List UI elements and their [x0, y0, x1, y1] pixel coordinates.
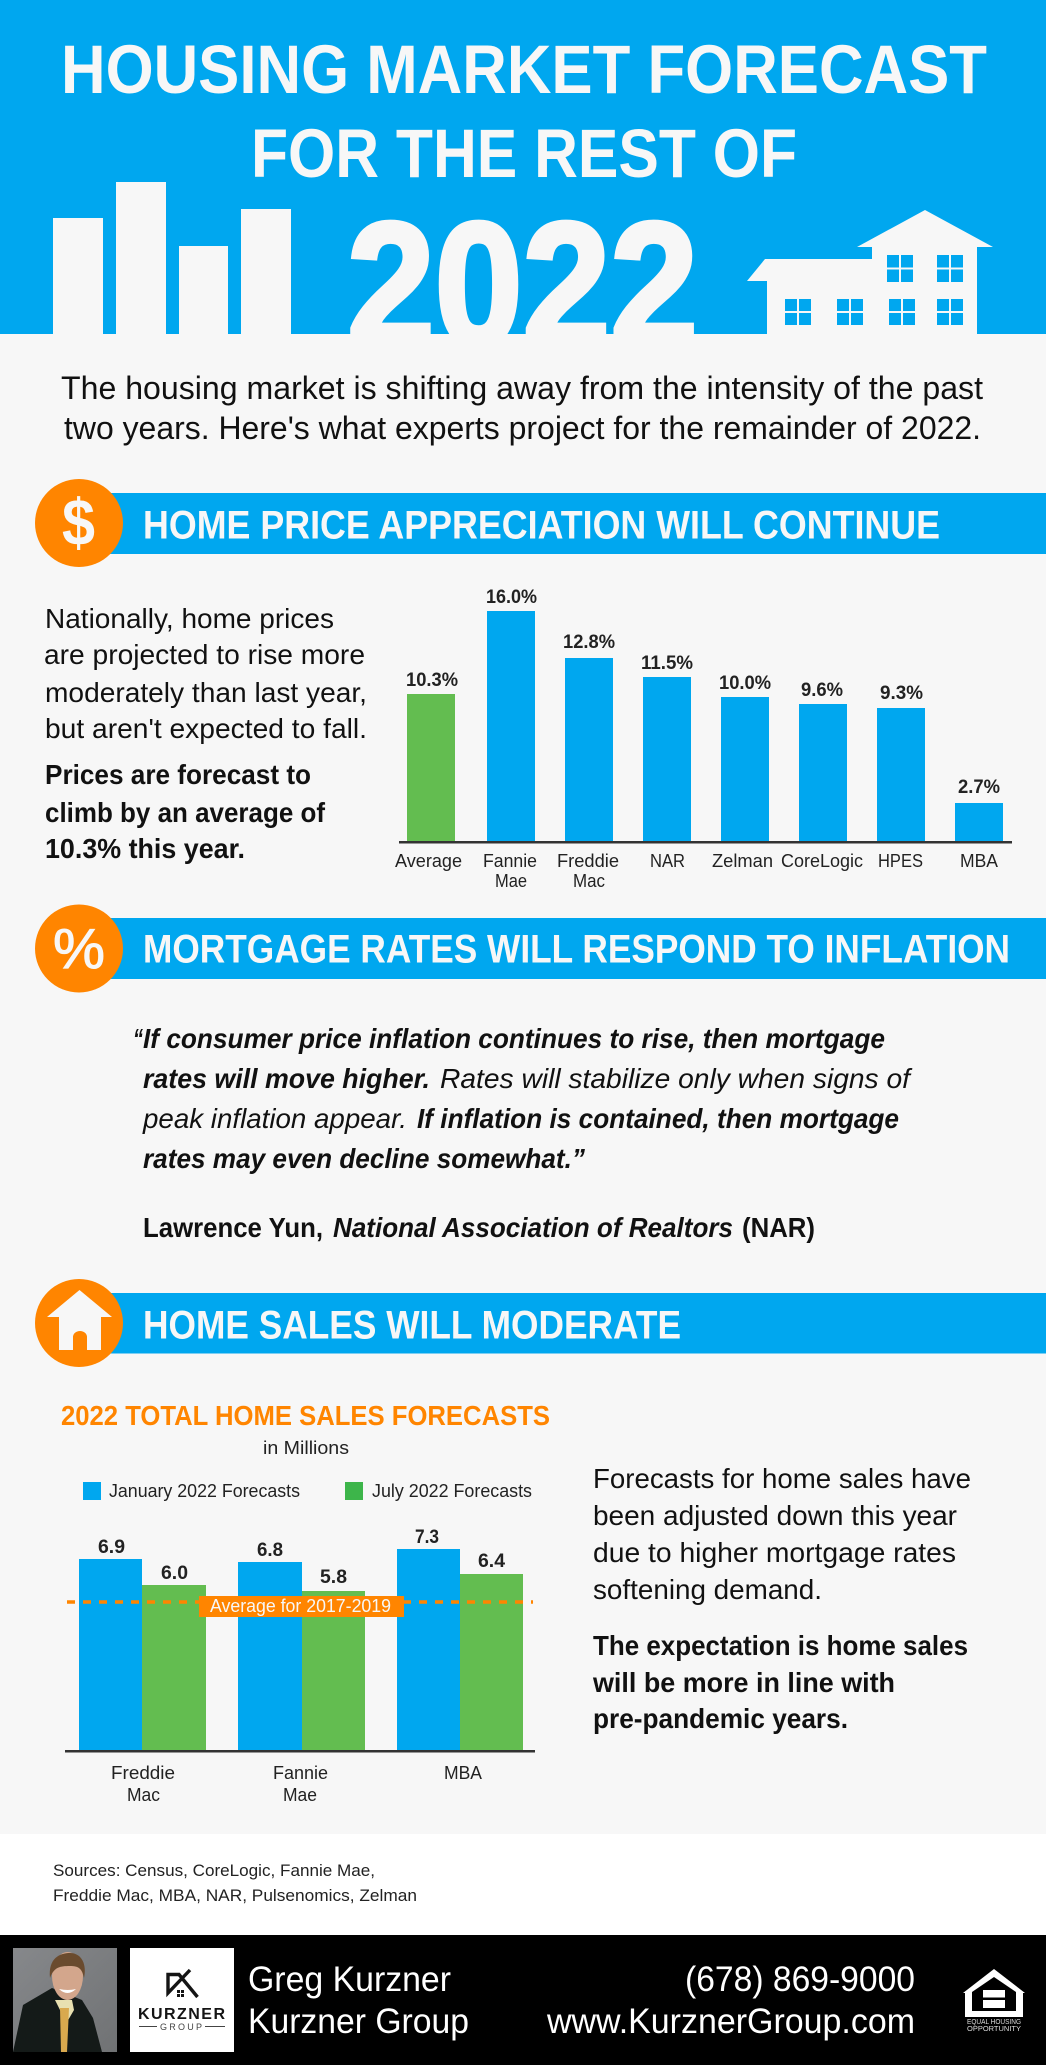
intro text — [61, 370, 983, 446]
quote: rates will move higher. — [143, 1063, 430, 1094]
intro text: two years. Here's what experts project for the remainder of 2022. — [64, 410, 981, 446]
quote attribution: Lawrence Yun, — [143, 1212, 323, 1243]
footer — [0, 1935, 1046, 2065]
legend — [83, 1481, 532, 1501]
bar chart: sales forecasts: MBA — [444, 1763, 482, 1783]
logo: GROUP — [160, 2022, 202, 2032]
agent name — [248, 1960, 469, 2041]
icon: percent: % — [53, 917, 105, 981]
icon: equal housing opportunity — [963, 1969, 1025, 2033]
icon: percent — [35, 904, 123, 992]
icon: dollar: $ — [62, 485, 95, 559]
bar chart: sales forecasts: Fannie — [273, 1763, 328, 1783]
section banner — [79, 1293, 1046, 1354]
text block: expectation: pre-pandemic years. — [593, 1703, 848, 1734]
bar chart: price forecasts: 9.3% — [880, 683, 923, 704]
agent name: Greg Kurzner — [248, 1960, 451, 1999]
panel: home price appreciation — [35, 479, 1046, 891]
bar chart: price forecasts: Fannie — [483, 851, 537, 871]
quote: If inflation is contained, then mortgage — [417, 1103, 899, 1134]
bar chart: sales forecasts: Mae — [283, 1785, 317, 1805]
text block: forecasts adjusted — [593, 1463, 971, 1605]
text block: average callout — [45, 759, 326, 864]
chart title: 2022 TOTAL HOME SALES FORECASTS — [61, 1400, 550, 1431]
header banner — [0, 0, 1046, 334]
agent name: Kurzner Group — [248, 2002, 469, 2041]
bar chart: price forecasts: 2.7% — [958, 777, 1000, 798]
quote attribution — [143, 1212, 815, 1243]
bar chart: price forecasts: 9.6% — [801, 680, 843, 701]
text block: national prices: Nationally, home prices — [45, 603, 334, 634]
quote: “ — [133, 1023, 143, 1054]
icon: home — [35, 1279, 123, 1367]
bar chart: sales forecasts: Mac — [127, 1785, 160, 1805]
agent photo — [13, 1948, 117, 2052]
quote: peak inflation appear. — [142, 1103, 407, 1134]
contact details — [546, 1960, 915, 2041]
text block: forecasts adjusted: Forecasts for home sales have — [593, 1463, 971, 1494]
panel: mortgage rates — [35, 904, 1046, 1243]
text block: average callout: 10.3% this year. — [45, 833, 245, 864]
logo mark — [168, 1970, 198, 1997]
bar chart: price forecasts: 10.3% — [406, 670, 458, 691]
title — [61, 31, 987, 192]
intro text: The housing market is shifting away from the intensity of the past — [61, 370, 983, 406]
bar chart: sales forecasts: 6.4 — [478, 1551, 505, 1572]
text block: national prices: moderately than last year, — [45, 677, 367, 708]
bar chart: price forecasts: CoreLogic — [781, 851, 863, 871]
bar chart: price forecasts: Zelman — [712, 851, 773, 871]
contact details: (678) 869-9000 — [685, 1960, 915, 1999]
sources panel — [0, 1834, 1046, 1935]
icon: equal housing opportunity: EQUAL HOUSING — [967, 2017, 1021, 2026]
text block: national prices — [44, 603, 367, 744]
logo: KURZNER — [138, 2006, 225, 2023]
icon: house — [747, 210, 993, 334]
bar chart: price forecasts: MBA — [960, 851, 998, 871]
text block: national prices: are projected to rise more — [44, 639, 365, 670]
bar chart: price forecasts: Freddie — [557, 851, 619, 871]
bar chart: price forecasts: 16.0% — [486, 587, 537, 608]
quote: If consumer price inflation continues to rise, then mortgage — [143, 1023, 885, 1054]
quote attribution: (NAR) — [742, 1212, 815, 1243]
section heading: HOME PRICE APPRECIATION WILL CONTINUE — [143, 504, 940, 548]
bar chart: price forecasts: 10.0% — [719, 673, 771, 694]
bar chart: sales forecasts: 6.9 — [98, 1537, 125, 1558]
sources panel: Sources: Census, CoreLogic, Fannie Mae, — [53, 1861, 375, 1880]
chart subtitle: in Millions — [263, 1438, 349, 1458]
bar chart: price forecasts: NAR — [650, 851, 685, 871]
skyline bars icon — [53, 182, 291, 334]
bar chart: sales forecasts: 6.8 — [257, 1540, 283, 1561]
bar chart: price forecasts: Mae — [495, 871, 527, 891]
bar chart: price forecasts — [395, 587, 1012, 891]
quote — [133, 1023, 913, 1174]
bar chart: sales forecasts: Freddie — [111, 1763, 175, 1783]
section heading: HOME SALES WILL MODERATE — [143, 1304, 681, 1348]
bar chart: price forecasts: HPES — [878, 851, 923, 871]
text block: expectation — [592, 1630, 968, 1734]
bar chart: sales forecasts: 7.3 — [415, 1527, 439, 1548]
callout: average: Average for 2017-2019 — [210, 1596, 391, 1616]
sources panel: Freddie Mac, MBA, NAR, Pulsenomics, Zelman — [53, 1886, 417, 1905]
section banner — [79, 918, 1046, 979]
legend: July 2022 Forecasts — [372, 1481, 532, 1501]
bar chart: sales forecasts: 6.0 — [161, 1563, 188, 1584]
bar chart: price forecasts: 11.5% — [641, 653, 693, 674]
text block: expectation: will be more in line with — [592, 1667, 895, 1698]
bar chart: price forecasts: Mac — [573, 871, 605, 891]
section banner — [79, 493, 1046, 554]
icon: dollar — [35, 479, 123, 567]
legend: January 2022 Forecasts — [109, 1481, 300, 1501]
year 2022: 2022 — [347, 187, 698, 383]
panel: home sales — [35, 1279, 1046, 1805]
title: FOR THE REST OF — [251, 115, 797, 192]
bar chart: price forecasts: 12.8% — [563, 632, 615, 653]
quote: Rates will stabilize only when signs of — [440, 1063, 913, 1094]
bar chart: sales forecasts: 5.8 — [320, 1567, 347, 1588]
text block: expectation: The expectation is home sales — [593, 1630, 968, 1661]
bar chart: sales forecasts — [65, 1527, 535, 1805]
text block: average callout: climb by an average of — [45, 797, 326, 828]
text block: national prices: but aren't expected to fall. — [45, 713, 367, 744]
text block: average callout: Prices are forecast to — [45, 759, 311, 790]
quote: rates may even decline somewhat.” — [143, 1143, 585, 1174]
quote attribution: National Association of Realtors — [333, 1212, 733, 1243]
logo — [130, 1948, 234, 2052]
text block: forecasts adjusted: softening demand. — [593, 1574, 822, 1605]
text block: forecasts adjusted: been adjusted down this year — [593, 1500, 957, 1531]
icon: equal housing opportunity: OPPORTUNITY — [967, 2024, 1021, 2033]
text block: forecasts adjusted: due to higher mortgage rates — [593, 1537, 956, 1568]
bar chart: price forecasts: Average — [395, 851, 462, 871]
contact details: www.KurznerGroup.com — [546, 2002, 915, 2041]
